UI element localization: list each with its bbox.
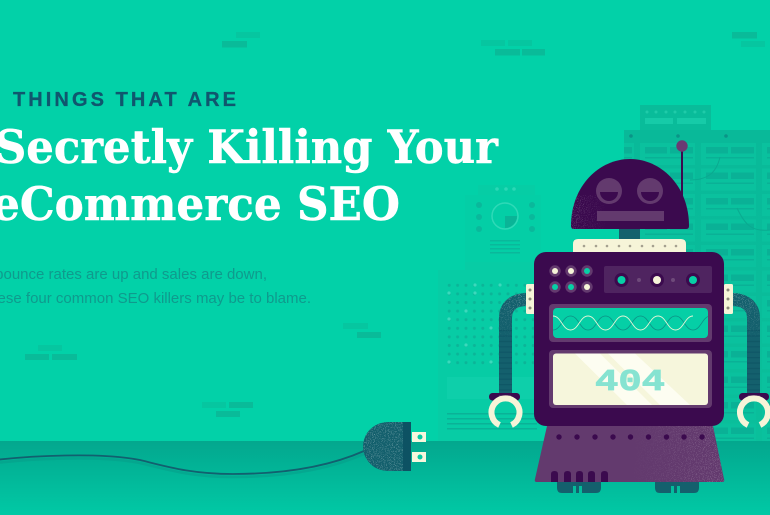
plug icon — [363, 422, 426, 471]
intro text — [0, 266, 311, 307]
wave screen — [549, 304, 712, 342]
404 screen — [549, 350, 712, 408]
control panel — [604, 266, 712, 293]
neck — [619, 228, 640, 240]
robot — [489, 140, 769, 493]
mouth — [597, 211, 664, 221]
collar — [573, 239, 686, 252]
skirt rivets — [556, 434, 705, 440]
eyes — [596, 178, 663, 204]
floor — [0, 441, 770, 515]
right server building — [624, 105, 770, 441]
right arm — [724, 284, 769, 425]
power cable — [0, 451, 364, 477]
404 screen: 404 — [595, 365, 665, 400]
title — [0, 120, 499, 231]
title: eCommerce SEO — [0, 177, 400, 231]
gauge icon — [492, 203, 518, 229]
left building with gauge — [438, 185, 541, 441]
head — [571, 159, 689, 229]
left arm — [489, 284, 535, 425]
eyebrow heading: THINGS THAT ARE — [13, 89, 236, 111]
feet — [557, 480, 699, 493]
skirt — [535, 426, 725, 482]
indicator lights — [549, 265, 593, 293]
skirt vents — [551, 471, 608, 482]
antenna — [676, 140, 688, 200]
background bricks — [25, 32, 765, 417]
plug prongs — [412, 432, 426, 462]
title: Secretly Killing Your — [0, 120, 499, 174]
body — [534, 252, 724, 426]
